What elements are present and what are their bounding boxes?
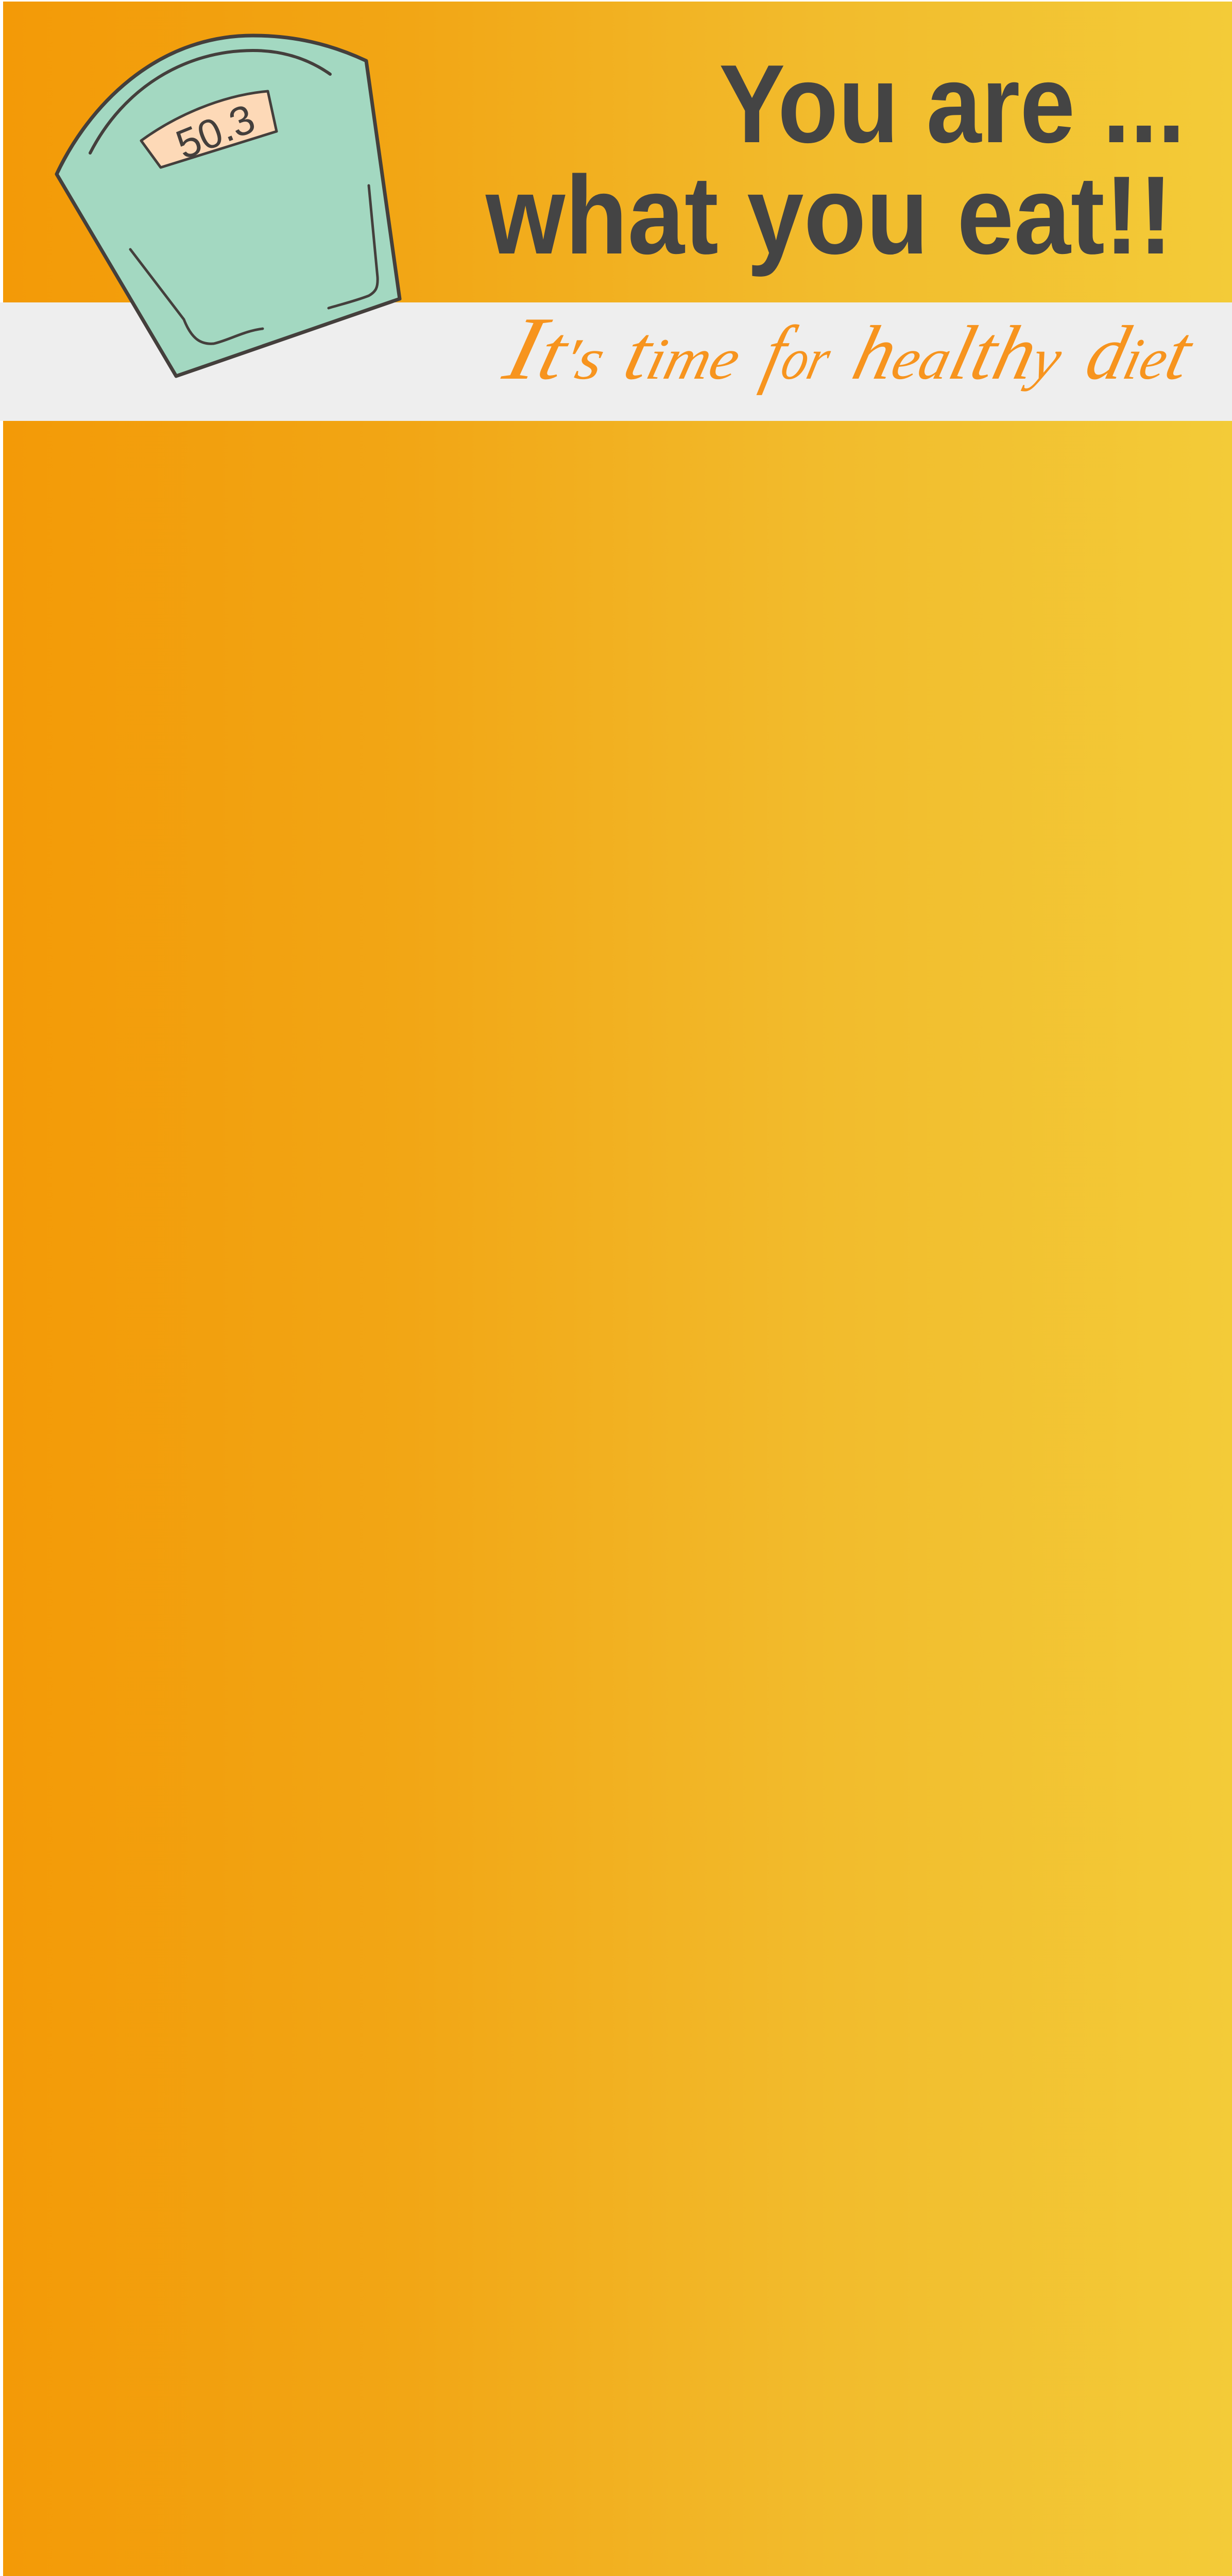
subtitle: healthy <box>845 310 1073 395</box>
title: what you eat!! <box>485 152 1173 277</box>
icon: bathroom scale <box>57 36 400 376</box>
scale inner rim top <box>90 50 330 153</box>
subtitle band <box>0 302 1232 421</box>
subtitle: diet <box>1079 310 1202 395</box>
scale inner rim bottom right <box>329 185 378 308</box>
title: You are ... <box>719 41 1185 166</box>
subtitle: time <box>617 310 751 395</box>
subtitle: for <box>756 310 842 395</box>
scale body <box>57 36 400 376</box>
subtitle <box>495 299 1202 398</box>
title <box>485 41 1185 277</box>
scale inner rim bottom left <box>130 249 263 344</box>
scale reading: 50.3 <box>169 95 261 168</box>
subtitle: It's <box>495 299 619 398</box>
scale display <box>141 91 277 167</box>
